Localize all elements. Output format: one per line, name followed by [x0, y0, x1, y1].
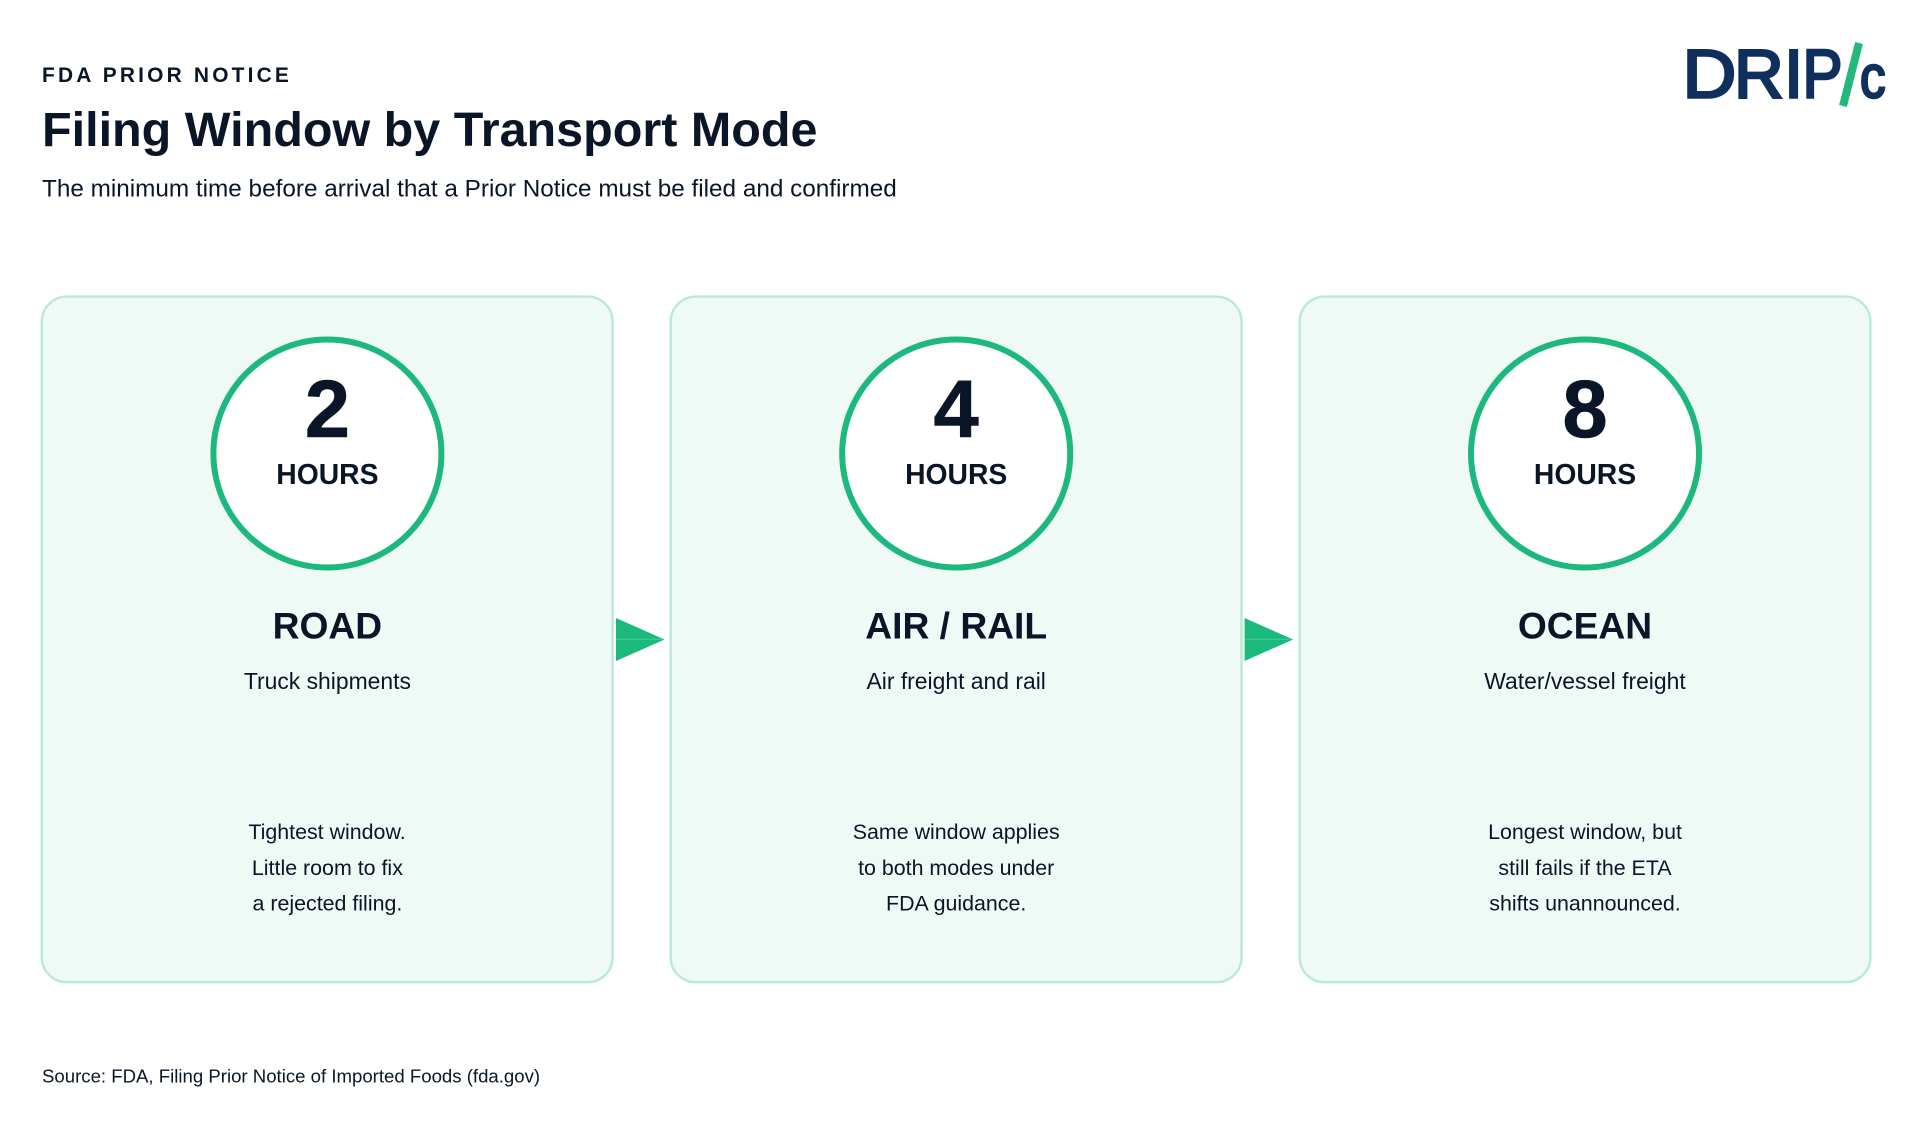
panel: road — [42, 297, 613, 982]
arrow: air/rail to ocean — [1245, 618, 1293, 661]
title: Filing Window by Transport Mode — [42, 103, 818, 157]
hours circle: 2 hours — [213, 340, 441, 568]
hours circle: 2 hours: 2 — [305, 364, 350, 455]
mode description: Water/vessel freight — [1484, 668, 1686, 694]
mode name: OCEAN — [1518, 604, 1652, 646]
hours circle: 4 hours: HOURS — [905, 458, 1007, 490]
panel: ocean — [1300, 297, 1870, 982]
mode description: Air freight and rail — [866, 668, 1046, 694]
hours circle: 8 hours — [1471, 340, 1699, 568]
hours circle: 4 hours — [842, 340, 1070, 568]
hours circle: 8 hours: HOURS — [1534, 458, 1636, 490]
note: to both modes under — [858, 856, 1054, 880]
note: a rejected filing. — [252, 892, 402, 916]
note: Longest window, but — [1488, 820, 1682, 844]
hours circle: 8 hours: 8 — [1562, 364, 1608, 455]
logo: I — [1784, 36, 1803, 113]
note: Tightest window. — [248, 820, 406, 844]
mode name: ROAD — [273, 604, 382, 646]
logo — [1682, 35, 1886, 113]
mode name: AIR / RAIL — [865, 604, 1047, 646]
note: still fails if the ETA — [1498, 856, 1672, 880]
logo: c — [1860, 44, 1886, 111]
hours circle: 2 hours: HOURS — [276, 458, 379, 490]
logo: P — [1802, 35, 1843, 113]
note: Little room to fix — [252, 856, 403, 880]
mode description: Truck shipments — [244, 668, 411, 694]
note: Same window applies — [853, 820, 1060, 844]
logo: R — [1734, 36, 1784, 113]
logo: D — [1682, 36, 1736, 113]
note: FDA guidance. — [886, 892, 1026, 916]
note: shifts unannounced. — [1489, 892, 1681, 916]
panel: air / rail — [671, 297, 1242, 982]
hours circle: 4 hours: 4 — [934, 364, 979, 455]
eyebrow: FDA PRIOR NOTICE — [42, 64, 292, 87]
arrow: road to air/rail — [616, 618, 664, 661]
subtitle: The minimum time before arrival that a Prior Notice must be filed and confirmed — [42, 176, 897, 202]
source: Source: FDA, Filing Prior Notice of Imported Foods (fda.gov) — [42, 1066, 540, 1086]
